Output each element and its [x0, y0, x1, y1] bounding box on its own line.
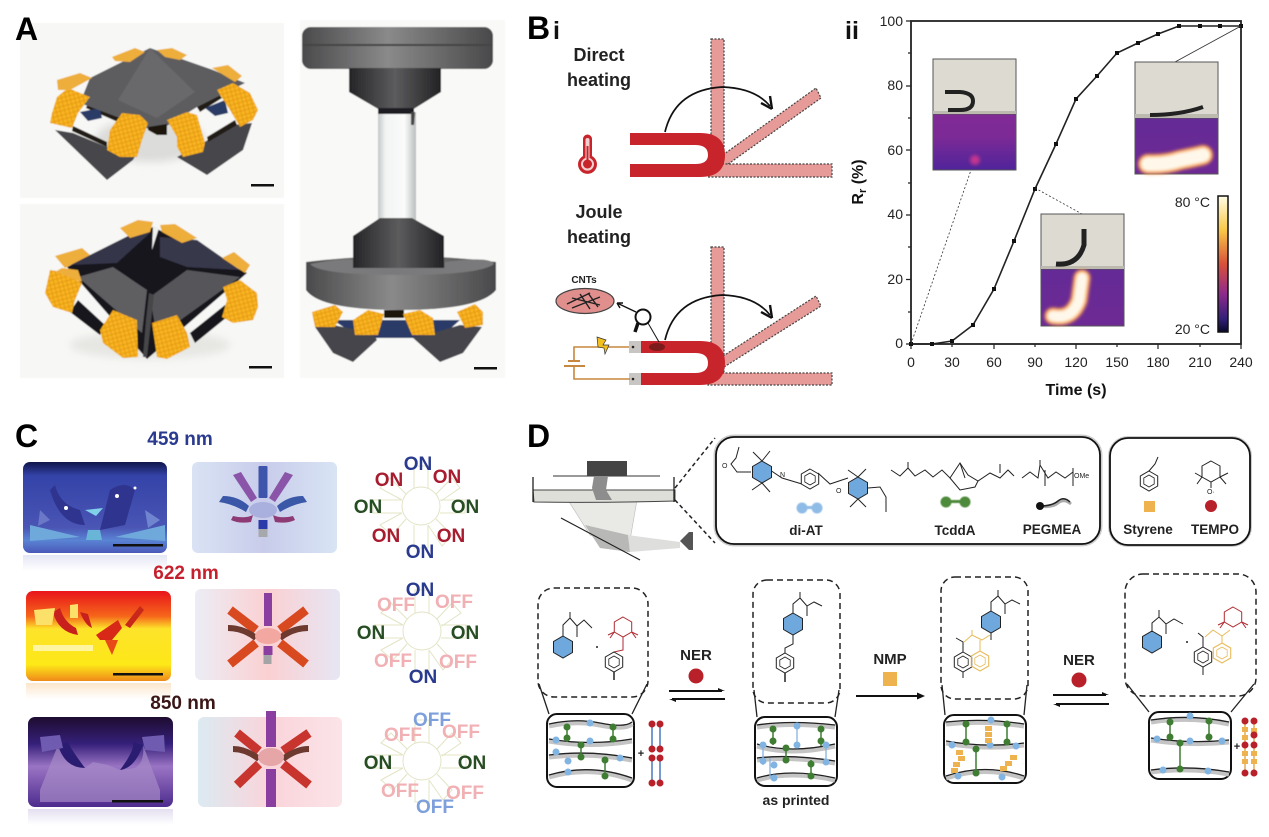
heading: C: C	[15, 418, 38, 454]
icon: TEMPO dot	[1205, 500, 1217, 512]
chart axes: 0	[895, 335, 903, 351]
chart axes: 210	[1188, 354, 1212, 370]
molecule: styrene	[1140, 457, 1158, 491]
heading: B: B	[527, 10, 550, 46]
arrow: NMP	[856, 651, 925, 700]
diagram: all ON	[354, 454, 479, 563]
diagram: all ON: ON	[404, 454, 432, 475]
chart axes: R	[850, 193, 867, 205]
chart axes: 90	[1027, 354, 1043, 370]
byproduct: TEMPO-capped chains	[638, 720, 664, 786]
panel A: origami gripper photos	[15, 11, 505, 378]
photo: gripper lifting weight	[300, 20, 505, 378]
photo: red light	[26, 591, 171, 699]
molecule: PEGMEA	[1022, 460, 1089, 486]
scheme step 2: as printed	[753, 580, 840, 786]
label: ii: ii	[845, 17, 859, 45]
molecule: di-AT: N	[780, 472, 785, 479]
byproduct: styrene-TEMPO chains	[1234, 718, 1258, 776]
arrow: bending	[665, 295, 772, 340]
chart axes: 240	[1229, 354, 1253, 370]
heading: A: A	[15, 11, 38, 47]
panel D: printing chemistry	[527, 418, 1258, 808]
molecule: TEMPO: O·	[1207, 489, 1215, 496]
scale bar	[249, 366, 272, 368]
diagram: near-infrared ON and OFF states: OFF	[446, 783, 484, 804]
heading: 850 nm: 850 nm	[150, 693, 216, 714]
chart axes: 60	[887, 142, 903, 158]
icon: PEGMEA chain	[1036, 499, 1071, 510]
icon: thermometer	[578, 134, 597, 174]
chart axes: 180	[1146, 354, 1170, 370]
diagram: near-infrared ON and OFF states: ON	[458, 753, 486, 774]
data line	[909, 24, 1243, 346]
text: PEGMEA: PEGMEA	[1023, 522, 1082, 537]
text: Direct heating	[567, 45, 631, 90]
byproduct: TEMPO-capped chains: +	[638, 748, 644, 760]
chart axes: 0	[907, 354, 915, 370]
inset: t = 90 s	[1041, 214, 1124, 326]
arrow: NMP: NMP	[873, 651, 907, 668]
scheme step 3: after NMP	[941, 577, 1028, 783]
illustration: vat printer	[533, 461, 693, 560]
arrow: NER equilibrium	[669, 647, 725, 702]
diagram: Joule heating hinge	[629, 247, 832, 385]
text: di-AT: di-AT	[789, 523, 823, 538]
molecule: TcddA	[891, 462, 1014, 490]
diagram: all ON: ON	[433, 467, 461, 488]
icon: di-AT dumbbell	[796, 502, 822, 514]
text: Direct heating: heating	[567, 70, 631, 90]
label: i: i	[553, 17, 560, 45]
text: Joule heating	[567, 202, 631, 247]
scheme step 1: after NER	[538, 588, 648, 787]
scale bar	[474, 367, 497, 370]
diagram: red light ON and OFF states: OFF	[374, 651, 412, 672]
text: TEMPO: TEMPO	[1191, 522, 1239, 537]
diagram: red light ON and OFF states: OFF	[377, 595, 415, 616]
diagram: red light ON and OFF states: ON	[406, 580, 434, 601]
chart axes: 150	[1105, 354, 1129, 370]
render: near-infrared light	[198, 711, 342, 807]
diagram: red light ON and OFF states: OFF	[435, 592, 473, 613]
photo: near-infrared light	[28, 717, 173, 825]
icon: styrene square	[1144, 501, 1155, 512]
legend: temperature colour bar	[1175, 194, 1228, 337]
text: Joule heating: Joule	[575, 202, 623, 222]
legend: temperature colour bar: 20 °C	[1175, 321, 1210, 337]
arrow: NER equilibrium	[1053, 652, 1109, 707]
diagram: red light ON and OFF states: OFF	[439, 652, 477, 673]
diagram: near-infrared ON and OFF states	[364, 710, 486, 818]
diagram: all ON: ON	[372, 526, 400, 547]
chart axes: (%)	[850, 159, 867, 189]
diagram: near-infrared ON and OFF states: OFF	[442, 722, 480, 743]
callout: zoom lines	[675, 438, 715, 543]
render: red light	[195, 589, 340, 680]
diagram: red light ON and OFF states: ON	[451, 623, 479, 644]
arrow: NER equilibrium: NER	[680, 647, 712, 664]
chart axes: 60	[986, 354, 1002, 370]
chart axes: 20	[887, 271, 903, 287]
chart axes: 30	[944, 354, 960, 370]
box: monomers	[716, 437, 1100, 544]
scale bar	[251, 184, 274, 186]
chart axes: 100	[880, 13, 903, 29]
icon: TcddA dumbbell	[940, 496, 970, 508]
diagram: all ON: ON	[375, 470, 403, 491]
icon: circuit	[564, 337, 634, 380]
chart axes	[850, 13, 1253, 399]
photo: blue light	[23, 462, 167, 571]
diagram: near-infrared ON and OFF states: OFF	[384, 725, 422, 746]
text: Styrene: Styrene	[1123, 522, 1173, 537]
diagram: red light ON and OFF states: ON	[357, 623, 385, 644]
legend: temperature colour bar: 80 °C	[1175, 194, 1210, 210]
diagram: all ON: ON	[354, 497, 382, 518]
diagram: red light ON and OFF states: ON	[409, 667, 437, 688]
text: as printed: as printed	[763, 792, 829, 808]
panel B-i: heating schematics	[527, 10, 832, 385]
heading: D: D	[527, 418, 550, 454]
render: blue light	[192, 462, 337, 553]
diagram: near-infrared ON and OFF states: OFF	[416, 797, 454, 818]
text: Joule heating: heating	[567, 227, 631, 247]
box: reagents	[1110, 438, 1250, 545]
diagram: near-infrared ON and OFF states: OFF	[381, 781, 419, 802]
diagram: all ON: ON	[437, 526, 465, 547]
molecule: di-AT	[722, 447, 886, 512]
callout: CNTs	[556, 275, 659, 342]
arrow: NER equilibrium: NER	[1063, 652, 1095, 669]
photo: open gripper from above	[20, 23, 284, 198]
chart axes: 80	[887, 77, 903, 93]
panel B-ii: recovery ratio chart	[845, 13, 1253, 399]
arrow: bending	[665, 87, 772, 132]
chart axes: 120	[1064, 354, 1088, 370]
diagram: direct heating hinge	[630, 39, 832, 177]
chart axes: Time (s)	[1045, 382, 1107, 399]
inset: t = 240 s	[1135, 62, 1218, 174]
molecule: PEGMEA: OMe	[1074, 473, 1089, 480]
heading: 622 nm: 622 nm	[153, 563, 219, 584]
callout: CNTs: CNTs	[571, 275, 597, 286]
text: Direct heating: Direct	[573, 45, 625, 65]
molecule: di-AT: O	[836, 488, 842, 495]
diagram: all ON: ON	[406, 542, 434, 563]
inset: t = 0 s	[933, 59, 1016, 170]
byproduct: styrene-TEMPO chains: +	[1234, 741, 1240, 753]
diagram: near-infrared ON and OFF states: ON	[364, 753, 392, 774]
chart axes: 40	[887, 206, 903, 222]
text: TcddA: TcddA	[934, 523, 976, 538]
panel C: wavelength-selective actuation	[15, 418, 486, 825]
photo: closed gripper	[20, 204, 284, 378]
molecule: di-AT: O	[722, 463, 728, 470]
chart axes: r	[857, 188, 869, 193]
diagram: red light ON and OFF states	[357, 580, 479, 688]
heading: 459 nm: 459 nm	[147, 429, 213, 450]
diagram: all ON: ON	[451, 497, 479, 518]
diagram: near-infrared ON and OFF states: OFF	[413, 710, 451, 731]
scheme step 4: reprogrammed	[1125, 574, 1256, 779]
